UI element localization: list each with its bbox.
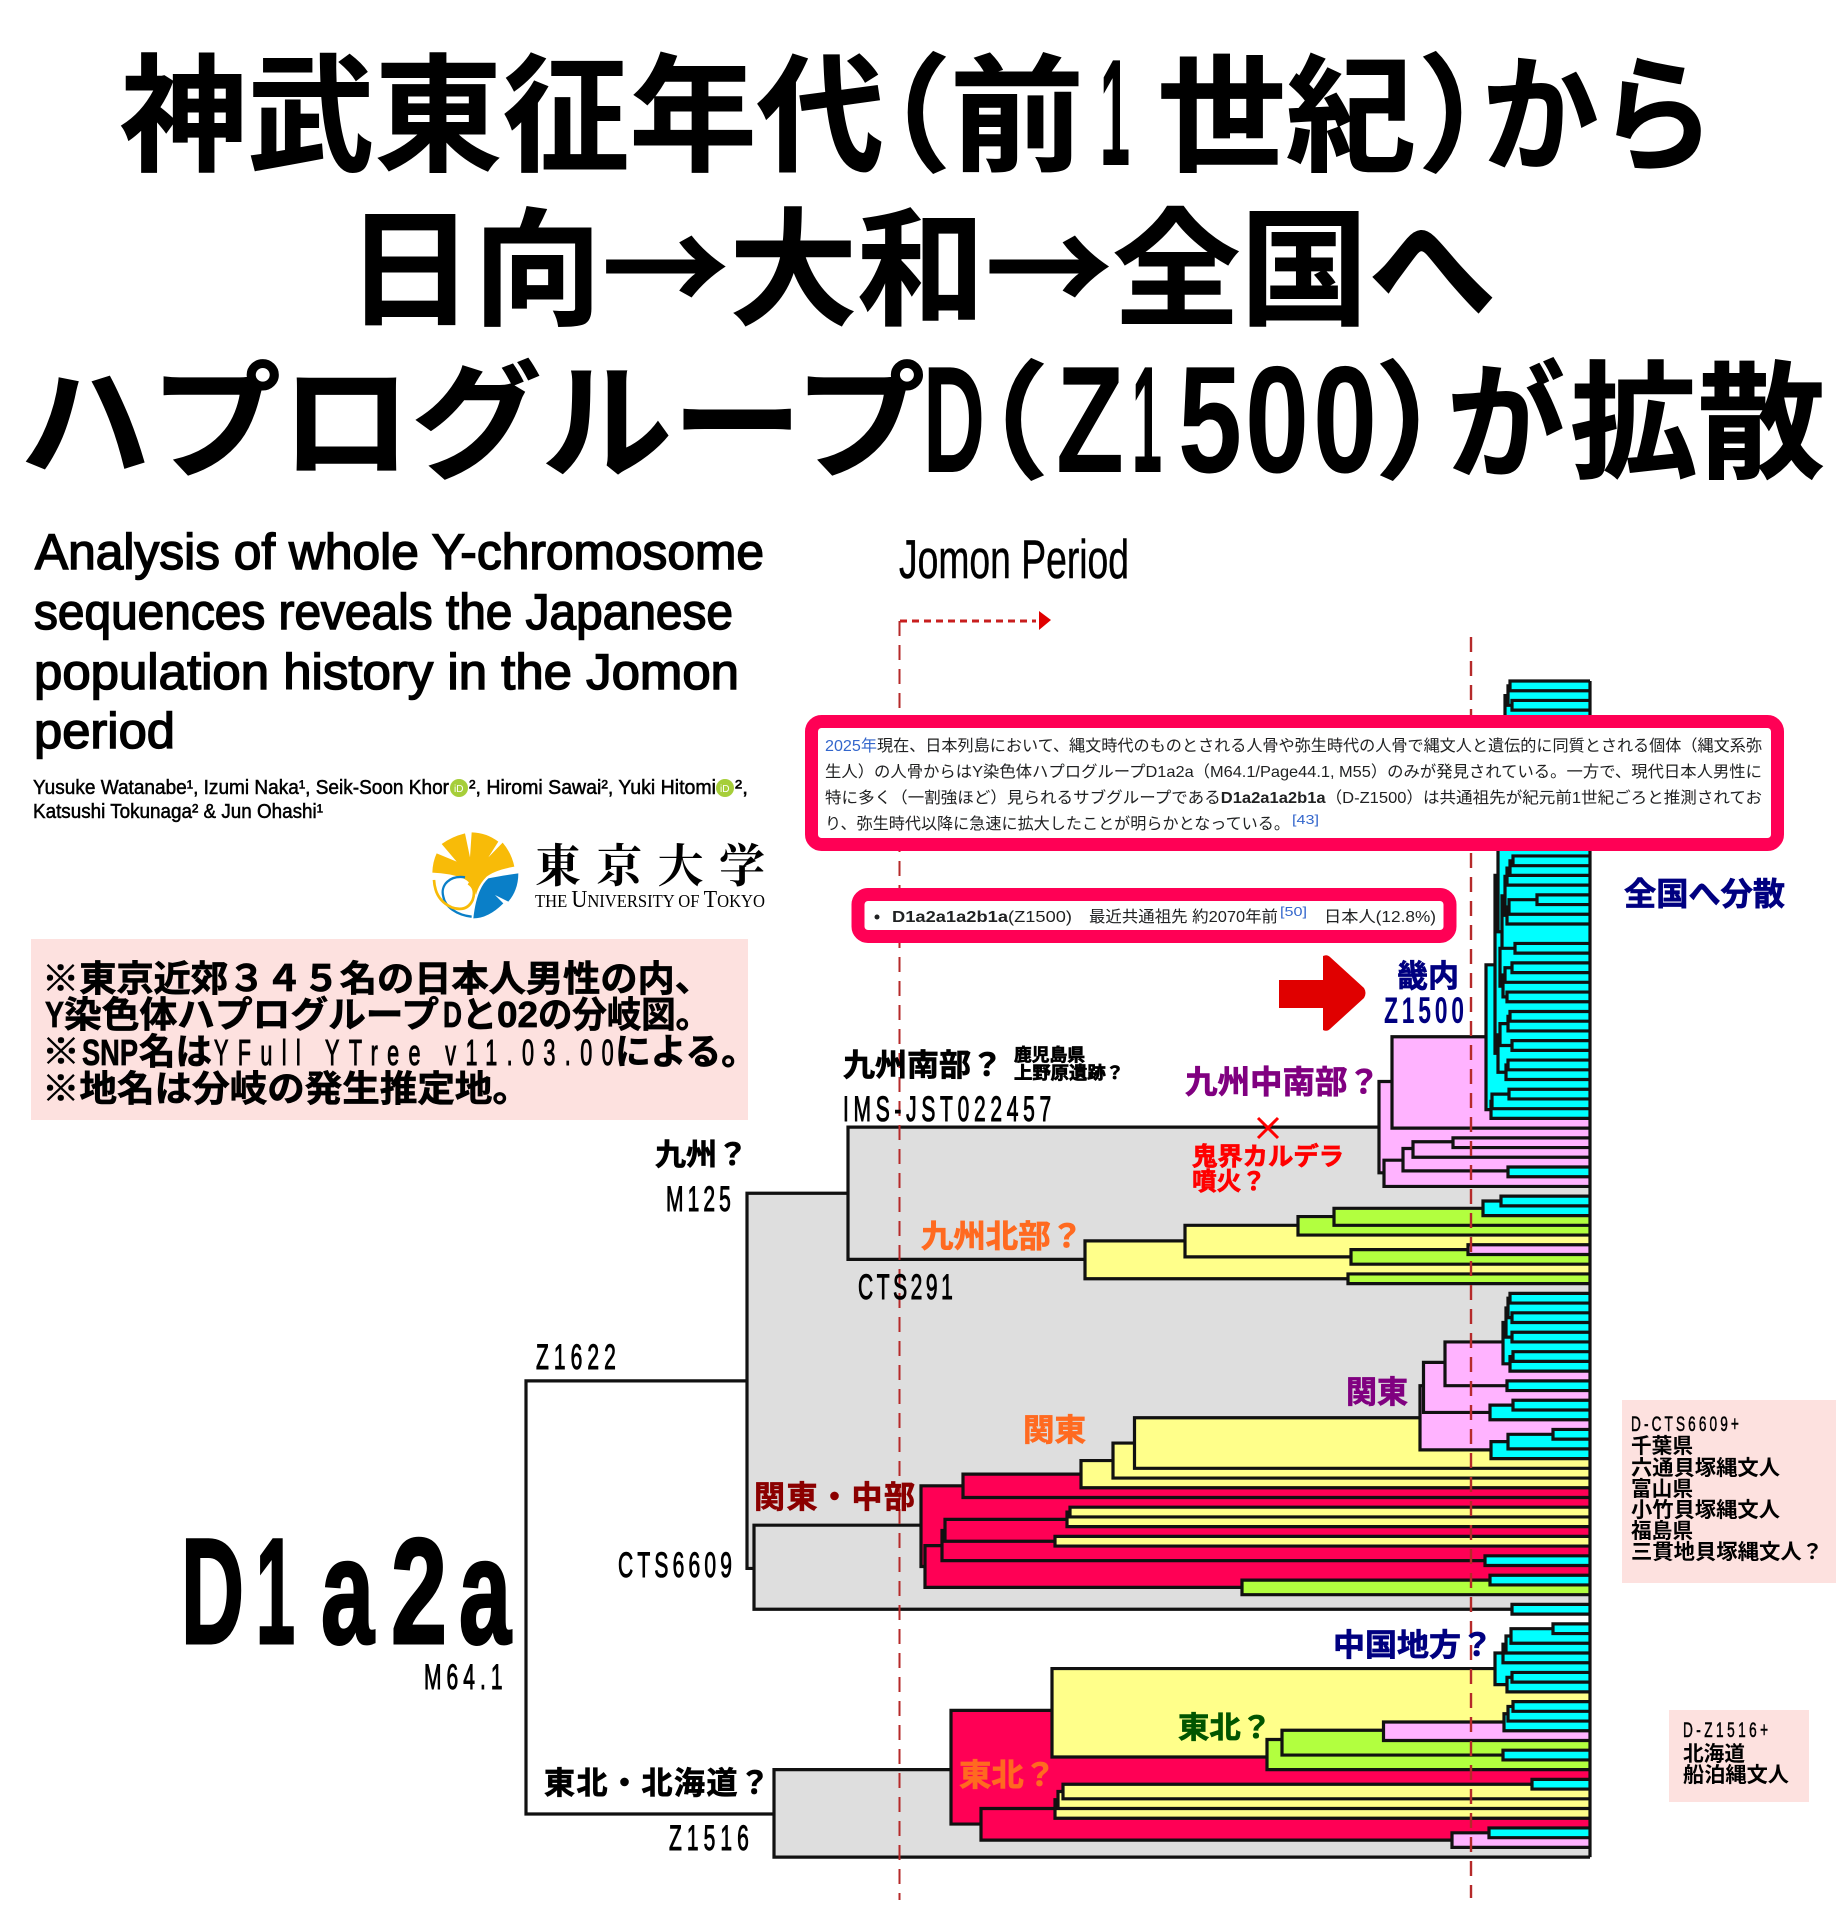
panel: notes: による。 — [615, 1031, 757, 1072]
paper title: period — [34, 703, 175, 759]
paper title: sequences reveals the Japanese — [34, 584, 733, 640]
paper title — [34, 524, 764, 759]
callout: D1a2a1a2b1a summary: (Z1500) — [1008, 909, 1072, 926]
panel: notes: ※地名は分岐の発生推定地。 — [42, 1068, 530, 1109]
paper title: Analysis of whole Y-chromosome — [35, 524, 764, 580]
title: ） — [1418, 14, 1545, 198]
label: southern Kyushu — [843, 1045, 1124, 1129]
panel: notes: 名は — [139, 1031, 212, 1072]
label: Kinai Z1500: 畿内 — [1397, 959, 1459, 994]
title: 0 — [1313, 335, 1377, 505]
panel: D-CTS6609+ samples: 六通貝塚縄文人 — [1631, 1457, 1780, 1480]
label: D1a2a: 1 — [256, 1507, 295, 1675]
callout: Wikipedia excerpt — [812, 722, 1778, 844]
authors: ², Hiromi Sawai², Yuki Hitomi — [469, 777, 716, 799]
panel: D-CTS6609+ samples: D-CTS6609+ — [1631, 1412, 1739, 1436]
title: ） — [1375, 321, 1502, 505]
label: Kanto orange: 関東 — [1023, 1413, 1086, 1448]
callout: Wikipedia excerpt: り、弥生時代以降に急速に拡大したことが明らかとなっている。 — [825, 814, 1290, 833]
panel: notes: D — [443, 994, 462, 1035]
label: Kanto Chubu: 関東・中部 — [754, 1480, 915, 1515]
label: Z1516: Z1516 — [669, 1820, 749, 1858]
title — [20, 14, 1825, 505]
panel: notes: Y — [45, 994, 64, 1035]
label: Kanto purple: 関東 — [1346, 1375, 1408, 1410]
panel: notes: YFull YTree v11.03.00 — [214, 1033, 614, 1073]
callout: Wikipedia excerpt: 2025年現在、日本列島において、縄文時代のものとされる人骨や弥生時代の人骨で縄文人と遺伝的に同質とされる個体（縄文系弥 — [825, 737, 1762, 755]
clade: Tohoku Z1516 — [774, 1624, 1590, 1857]
icon: red cross — [1258, 1118, 1278, 1138]
title: が — [1447, 321, 1565, 505]
label: Chugoku: 中国地方？ — [1333, 1628, 1493, 1663]
panel: D-Z1516+ samples: 船泊縄文人 — [1683, 1764, 1789, 1787]
panel: D-CTS6609+ samples — [1622, 1400, 1836, 1583]
Jomon period markers — [899, 528, 1471, 1900]
panel: D-CTS6609+ samples: 三貫地貝塚縄文人？ — [1631, 1541, 1823, 1564]
label: D1a2a: 2 — [391, 1507, 447, 1675]
authors: iD — [454, 784, 463, 795]
authors: Katsushi Tokunaga² & Jun Ohashi¹ — [33, 801, 323, 823]
panel: D-Z1516+ samples: D-Z1516+ — [1683, 1718, 1768, 1742]
panel: notes: ※東京近郊３４５名の日本人男性の内、 — [42, 958, 712, 999]
authors: iD — [720, 784, 729, 795]
label: Kinai Z1500: Z1500 — [1384, 989, 1464, 1031]
panel: notes: の分岐図。 — [538, 994, 710, 1035]
root branch D1a2a — [526, 1381, 774, 1814]
label: D1a2a — [181, 1507, 512, 1675]
label: Kinai Z1500 — [1384, 959, 1464, 1031]
label: D1a2a: a — [459, 1507, 512, 1675]
Jomon period markers: Jomon Period — [899, 528, 1129, 590]
logo: University of Tokyo — [432, 832, 765, 918]
authors: ², — [735, 777, 748, 799]
title: ハプログループ — [20, 321, 925, 505]
label: southern Kyushu: 鹿児島県 — [1014, 1045, 1085, 1065]
label: spread nationwide: 全国へ分散 — [1624, 876, 1785, 912]
panel: D-Z1516+ samples: 北海道 — [1683, 1743, 1745, 1766]
panel: notes: と — [462, 994, 497, 1035]
title: （ — [922, 321, 1049, 505]
panel: notes: ※ — [42, 1031, 80, 1072]
clade Z1622 — [747, 681, 1590, 1614]
label: Kikai caldera eruption: 鬼界カルデラ — [1192, 1142, 1344, 1171]
title: 拡散 — [1570, 321, 1825, 505]
title: 前 — [950, 14, 1084, 198]
label: Tohoku orange: 東北？ — [959, 1758, 1056, 1793]
title: 0 — [1245, 335, 1309, 505]
label: Kikai caldera eruption: 噴火？ — [1192, 1168, 1266, 1196]
callout: D1a2a1a2b1a summary: [50] — [1280, 904, 1307, 919]
label: southern Kyushu: 九州南部？ — [843, 1048, 1003, 1083]
clade: northern Kyushu CTS291 — [1085, 1196, 1590, 1284]
icon: ginkgo leaf — [432, 832, 518, 918]
authors: Yusuke Watanabe¹, Izumi Naka¹, Seik-Soon Khor — [33, 777, 449, 799]
label: D1a2a: D — [181, 1507, 244, 1675]
label: Kyushu M125 — [655, 1139, 748, 1219]
label: M64.1: M64.1 — [424, 1659, 503, 1697]
panel: notes: 02 — [497, 994, 538, 1035]
title: 1 — [1132, 335, 1162, 505]
authors — [33, 777, 748, 823]
label: Kyushu M125: M125 — [666, 1181, 731, 1219]
title: 1 — [1100, 28, 1130, 198]
callout: Wikipedia excerpt: 生人）の人骨からはY染色体ハプログループD1a2a（M64.1/Page44.1, M55）のみが発見されている。一方で、現代日本人男性に — [825, 763, 1762, 781]
panel: D-CTS6609+ samples: 富山県 — [1631, 1478, 1693, 1501]
title: Z — [1056, 335, 1124, 505]
label: south-central Kyushu: 九州中南部？ — [1185, 1064, 1380, 1100]
arrow: Jomon period start — [900, 611, 1051, 630]
title: から — [1482, 14, 1715, 198]
panel: D-CTS6609+ samples: 小竹貝塚縄文人 — [1631, 1499, 1780, 1522]
title: 5 — [1178, 335, 1242, 505]
label: D1a2a: a — [321, 1507, 375, 1675]
callout: D1a2a1a2b1a summary: D1a2a1a2b1a — [892, 909, 1008, 926]
title: D — [923, 335, 985, 505]
panel: D-CTS6609+ samples: 千葉県 — [1631, 1435, 1693, 1458]
callout: D1a2a1a2b1a summary: 最近共通祖先 約2070年前 — [1089, 908, 1278, 926]
title: （ — [824, 14, 951, 198]
panel: notes: 染色体ハプログループ — [64, 994, 439, 1035]
label: Kyushu M125: 九州？ — [655, 1139, 748, 1172]
logo: University of Tokyo: THE UNIVERSITY OF TOKYO — [535, 887, 765, 913]
paper title: population history in the Jomon — [34, 644, 739, 700]
logo: University of Tokyo: 東京大学 — [535, 841, 765, 892]
clade: Kanto CTS6609 — [754, 1293, 1590, 1614]
label: Kikai caldera eruption — [1192, 1142, 1344, 1196]
label: Tohoku green: 東北？ — [1178, 1712, 1272, 1745]
label: southern Kyushu: IMS-JST022457 — [843, 1091, 1051, 1129]
label: Z1622: Z1622 — [536, 1339, 616, 1377]
label: CTS6609: CTS6609 — [618, 1547, 732, 1585]
callout: Wikipedia excerpt: 特に多く（一割強ほど）見られるサブグループである D1a2a1a2b1a（D-Z1500）は共通祖先が紀元前1世紀ごろと推測されてお — [825, 788, 1762, 807]
label: southern Kyushu: 上野原遺跡？ — [1014, 1063, 1124, 1083]
title: 世紀 — [1157, 14, 1415, 198]
arrow: red pointer to Kinai — [1279, 955, 1366, 1031]
callout: D1a2a1a2b1a summary — [858, 894, 1450, 936]
label: CTS291: CTS291 — [858, 1269, 953, 1307]
panel: notes — [31, 939, 757, 1120]
panel: D-Z1516+ samples — [1669, 1710, 1809, 1802]
label: northern Kyushu: 九州北部？ — [921, 1218, 1083, 1254]
label: Tohoku Hokkaido: 東北・北海道？ — [544, 1766, 770, 1801]
callout: D1a2a1a2b1a summary: 日本人(12.8%) — [1324, 908, 1436, 926]
callout: Wikipedia excerpt: [43] — [1292, 812, 1319, 827]
phylogenetic tree — [526, 681, 1590, 1857]
clade: southern Kyushu and Z1500 — [1379, 681, 1590, 1186]
title: 神武東征年代 — [120, 14, 884, 198]
panel: notes: SNP — [82, 1032, 138, 1073]
panel: D-CTS6609+ samples: 福島県 — [1631, 1520, 1693, 1543]
title: 日向→大和→全国へ — [346, 168, 1496, 352]
